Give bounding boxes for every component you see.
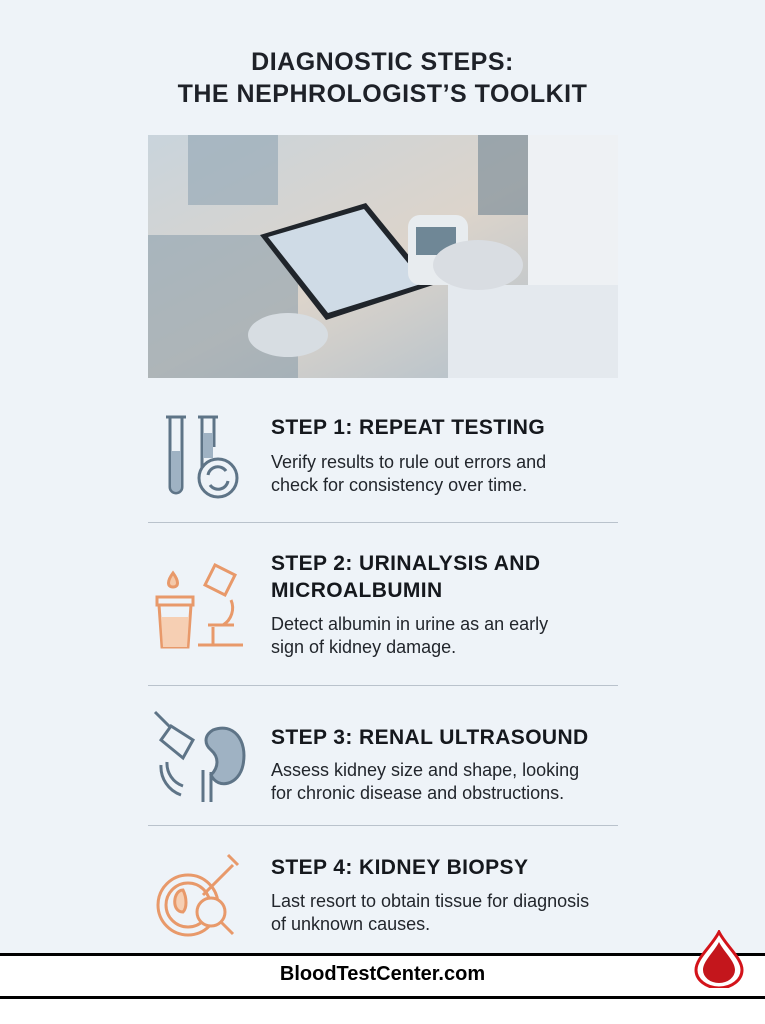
heading: STEP 2: URINALYSIS AND — [271, 552, 540, 575]
icon: ultrasound kidney — [154, 711, 246, 802]
text: Detect albumin in urine as an early — [271, 614, 548, 634]
text: for chronic disease and obstructions. — [271, 783, 564, 803]
icon: biopsy kidney magnifier — [156, 854, 239, 936]
footer — [0, 953, 765, 1024]
icon: urine cup microscope — [156, 563, 243, 648]
text — [271, 614, 548, 657]
title: THE NEPHROLOGIST’S TOOLKIT — [178, 80, 587, 108]
text: of unknown causes. — [271, 914, 430, 934]
text — [271, 760, 579, 803]
step 4 — [156, 854, 589, 936]
text: Assess kidney size and shape, looking — [271, 760, 579, 780]
step 3 — [154, 711, 589, 803]
text: check for consistency over time. — [271, 475, 527, 495]
step 2 — [156, 552, 548, 657]
text: Verify results to rule out errors and — [271, 452, 546, 472]
heading: STEP 3: RENAL ULTRASOUND — [271, 726, 589, 749]
text: Last resort to obtain tissue for diagnosis — [271, 891, 589, 911]
heading: MICROALBUMIN — [271, 579, 443, 602]
text: sign of kidney damage. — [271, 637, 456, 657]
step 1 — [166, 416, 546, 498]
heading: STEP 1: REPEAT TESTING — [271, 416, 545, 439]
title — [178, 48, 587, 108]
icon: blood drop logo — [694, 930, 744, 988]
photo: doctor with tablet — [148, 135, 618, 378]
text — [271, 452, 546, 495]
heading: STEP 4: KIDNEY BIOPSY — [271, 856, 528, 879]
icon: test tubes refresh — [166, 416, 238, 498]
footer text: BloodTestCenter.com — [280, 963, 485, 985]
text — [271, 891, 589, 934]
title: DIAGNOSTIC STEPS: — [251, 48, 514, 76]
heading — [271, 552, 540, 602]
